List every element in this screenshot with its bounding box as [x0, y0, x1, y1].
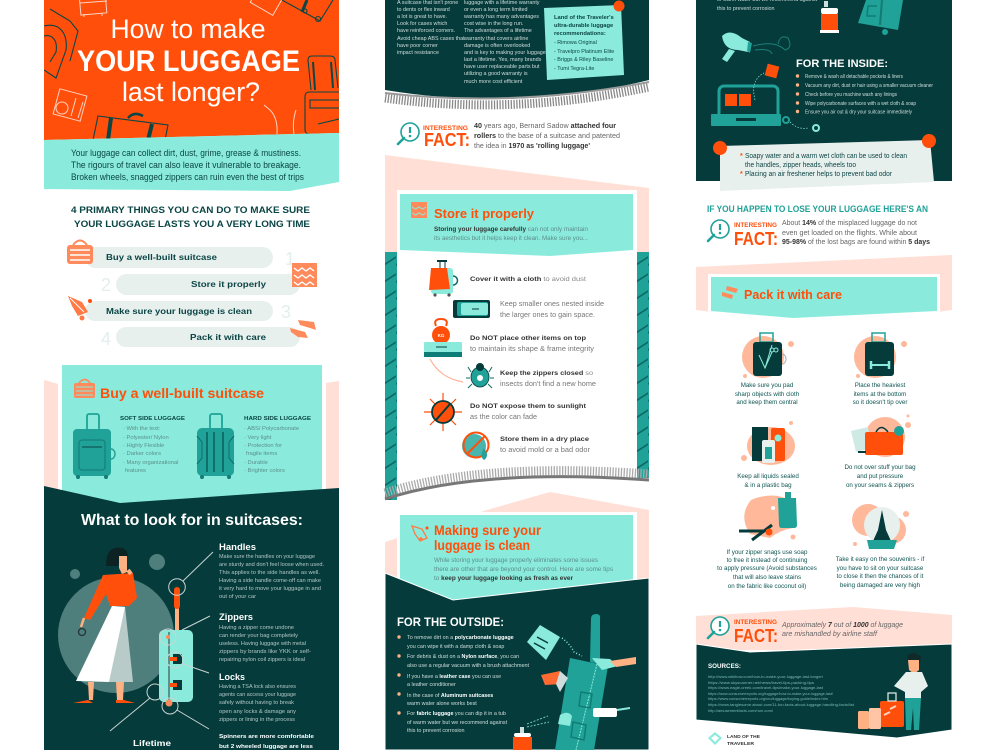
icon: cleaning brush: [68, 296, 92, 320]
callout: interesting fact 2: even get loaded on the flights. While about: [782, 230, 917, 237]
text: zipper: on the fabric like coconut oil): [728, 583, 806, 590]
text: handles: out of your car: [219, 594, 256, 600]
heading: primary things: [71, 205, 310, 229]
callout: interesting fact 2: 95-98% of the lost bags are found within 5 days: [782, 239, 930, 246]
text: locks: zippers or lining in the process: [219, 717, 295, 723]
text: heaviest items: so it doesn't tip over: [853, 399, 907, 406]
text: corners column: have poor corner: [397, 43, 438, 49]
icon: hair dryer: [722, 32, 790, 62]
icon: bug: [466, 363, 494, 388]
callout: inside note: *: [740, 153, 743, 160]
text: warranty column: or even a long term limited: [464, 7, 528, 13]
callout: interesting fact 1: FACT:: [424, 130, 470, 150]
list: four things: 2: [101, 275, 111, 295]
text: do not place: Do NOT place other items on top: [470, 335, 586, 342]
icon: passport outline: [53, 89, 87, 121]
text: zippers: Zippers: [219, 612, 253, 622]
text: outside tips continued: [717, 0, 818, 12]
text: heaviest items: [853, 382, 907, 406]
callout: recommendations note: - Travelpro Platinum Elite: [554, 49, 614, 55]
list: links: http://amusementfacts.com/rum.com/: [708, 708, 774, 713]
icon: sharp objects suitcase: [742, 333, 794, 378]
illustration: suitcase bottom: [858, 0, 903, 35]
text: souvenirs: [836, 556, 924, 589]
text: corners column: have reinforced corners.: [397, 28, 455, 34]
text: warranty column: [463, 0, 546, 85]
arrow: bug to case: [430, 359, 463, 382]
text: liquids: & in a plastic bag: [744, 482, 792, 489]
text: dry place: Store them in a dry place: [500, 436, 589, 443]
text: handles: Handles: [219, 542, 256, 552]
list: links: https://www.consumerreports.org/luggage/how-to-make-your-luggage-last/: [708, 691, 834, 696]
text: warranty column: have user replaceable parts but: [464, 64, 540, 70]
illustration: traveller with luggage: [858, 653, 928, 730]
icon: no sunlight: [424, 393, 462, 431]
text: zippers closed: Keep the zippers closed so: [500, 370, 593, 377]
list: outside tips: warm water alone works best: [406, 701, 477, 707]
text: sunlight: [470, 403, 587, 421]
list: links: [708, 674, 855, 713]
text: intro: While storing your luggage properly eliminates some issues: [434, 557, 598, 564]
list: outside tips: To remove dirt on a polycarbonate luggage: [407, 635, 514, 641]
text: do not place: to maintain its shape & frame integrity: [470, 346, 595, 353]
callout: inside note: [713, 134, 936, 191]
icon: heaviest items suitcase: [854, 333, 907, 378]
icon: brush: [412, 526, 428, 541]
text: liquids: [737, 473, 799, 489]
text: handles: Having a side handle come-off can make: [219, 578, 321, 584]
icon: zipper and soap: [739, 492, 797, 540]
text: hard side luggage: · Brighter colors: [244, 468, 285, 474]
text: dry place: to avoid mold or a bad odor: [500, 447, 591, 454]
list: four things: Buy a well-built suitcase: [106, 252, 217, 262]
icon: stacked cases: [292, 263, 317, 287]
icon: souvenir snow globe: [852, 504, 909, 549]
text: intro: [434, 226, 588, 242]
callout: interesting fact 1: the idea in 1970 as 'rolling luggage': [474, 143, 590, 150]
list: outside tips: [397, 635, 529, 734]
text: zippers: Having a zipper come undone: [219, 625, 294, 631]
icon: kettlebell on case: [424, 319, 462, 357]
callout: interesting fact 2: About 14% of the misplaced luggage do not: [782, 220, 917, 227]
icon: basket: [74, 380, 95, 398]
list: four things: 4: [101, 329, 111, 349]
icon: top suitcase outline: [79, 0, 107, 17]
list: outside tips: also use a regular vacuum with a brush attachment: [407, 663, 529, 669]
callout: inside note: Placing an air freshener helps to prevent bad odor: [745, 171, 893, 178]
icon: covered suitcase: [429, 260, 458, 297]
text: soft side luggage: [120, 416, 185, 474]
text: hard side luggage: · ABS/ Polycarbonate: [244, 426, 299, 432]
heading: FOR THE OUTSIDE:: [397, 617, 504, 629]
text: souvenirs: being damaged are very high: [840, 582, 921, 589]
callout: interesting fact 3: Approximately 7 out of 1000 of luggage: [781, 622, 903, 629]
list: inside tips: [796, 74, 933, 116]
text: intro: its aesthetics but it helps keep it clean. Make sure you...: [434, 235, 588, 242]
text: cover: Cover it with a cloth to avoid dust: [470, 276, 586, 283]
callout: recommendations note: recommendations:: [554, 31, 606, 37]
text: sharp objects: [735, 382, 800, 406]
text: soft side luggage: SOFT SIDE LUGGAGE: [120, 416, 185, 422]
callout: interesting fact 1: rollers to the base of a suitcase and patented: [474, 133, 620, 140]
icon: backpack outline: [44, 9, 78, 78]
text: intro: there are other that are beyond your control. Here are some tips: [434, 566, 613, 573]
list: outside tips: If you have a leather case you can use: [407, 674, 501, 680]
text: soft side luggage: · Darker colors: [123, 451, 161, 457]
callout: interesting fact 2: FACT:: [734, 229, 778, 249]
text: handles: it very hard to move your luggage in and: [219, 586, 321, 592]
text: warranty column: utilizing a good warranty is: [464, 71, 528, 77]
text: zipper: [717, 549, 817, 590]
callout: recommendations note: - Tumi Tegra-Lite: [554, 66, 594, 72]
icon: caring hands: [290, 320, 316, 338]
text: handles: This applies to the side handles as well.: [219, 570, 320, 576]
text: locks: [219, 672, 296, 723]
text: handles: Make sure the handles on your luggage: [219, 554, 315, 560]
callout: interesting fact 1: INTERESTING: [423, 125, 468, 132]
text: wheels: Spinners are more comfortable: [219, 734, 315, 740]
icon: no moisture: [462, 432, 488, 460]
text: sharp objects: sharp objects with cloth: [735, 391, 800, 398]
list: four things: Make sure your luggage is clean: [106, 306, 252, 316]
panel: making sure your luggage is clean: [385, 492, 649, 600]
icon: basket: [67, 240, 93, 264]
text: zippers: zippers by brands like YKK or self-: [219, 649, 311, 655]
panel: intro band: [44, 133, 339, 191]
callout: interesting fact 3: are mishandled by airline staff: [782, 631, 878, 638]
heading: Making sure your: [434, 522, 542, 538]
heading: Buy a well-built suitcase: [100, 385, 264, 401]
panel: for the outside: [385, 573, 649, 750]
text: warranty column: warranty that covers airline: [463, 36, 528, 42]
text: intro: [434, 557, 613, 582]
text: heaviest items: Place the heaviest: [855, 382, 906, 389]
text: warranty column: much more cost efficient: [464, 79, 523, 85]
text: hard side luggage: HARD SIDE LUGGAGE: [244, 416, 311, 422]
text: souvenirs: Take it easy on the souvenirs - if: [836, 556, 924, 563]
callout: interesting fact 1: [398, 123, 620, 150]
text: zipper: to free it instead of continuing: [727, 557, 808, 564]
text: corners column: impact resistance: [397, 50, 439, 56]
illustration: cleaning suitcase: [513, 614, 636, 750]
heading: Store it properly: [434, 207, 534, 221]
text: soft side luggage: · With the text:: [123, 426, 161, 432]
text: dry place: [500, 436, 591, 454]
icon: hard luggage: [197, 414, 234, 479]
callout: interesting fact 2: [708, 220, 930, 249]
text: corners column: [397, 0, 465, 56]
text: corners column: Look for cases which: [397, 21, 447, 27]
title text: last longer?: [122, 77, 260, 107]
illustration: open suitcase: [711, 64, 819, 131]
text: overstuffed: and put pressure: [857, 473, 904, 480]
list: links: https://www.eagle-creek.com/travel-tips/make-your-luggage-last: [708, 685, 824, 690]
callout: recommendations note: Land of the Traveler's: [554, 15, 614, 21]
list: inside tips: Vacuum any dirt, dust or hair using a smaller vacuum cleaner: [805, 83, 933, 89]
list: outside tips: For debris & dust on a Nylon surface, you can: [407, 654, 519, 660]
list: four things: 3: [281, 302, 291, 322]
text: soft side luggage: · Many organizational: [123, 460, 178, 466]
text: nested: the larger ones to gain space.: [500, 312, 595, 319]
heading: SOURCES:: [708, 663, 741, 670]
icon: top right luggage: [282, 0, 333, 22]
text: nested: [500, 301, 604, 319]
list: inside tips: Ensure you air out & dry your suitcase immediately: [805, 110, 912, 116]
heading: FOR THE INSIDE:: [796, 58, 888, 70]
callout: interesting fact 2: INTERESTING: [734, 222, 777, 229]
panel: intro band: Broken wheels, snagged zippers can ruin even the best of trips: [71, 172, 304, 182]
callout: inside note: *: [740, 171, 743, 178]
icon: soft luggage: [73, 414, 115, 479]
text: wheels: but 2 wheeled luggage are less: [219, 744, 314, 750]
text: hard side luggage: [244, 416, 311, 474]
panel: pack it with care: [696, 255, 952, 590]
decorative zipper: [385, 471, 649, 493]
heading: What to look for in suitcases:: [81, 512, 303, 529]
text: warranty column: damage is often overlooked: [464, 43, 530, 49]
text: nested: Keep smaller ones nested inside: [500, 301, 604, 308]
heading: Pack it with care: [744, 288, 842, 302]
text: soft side luggage: · Highly Flexible: [123, 443, 164, 449]
text: corners column: a lot is great to have.: [397, 14, 447, 20]
text: locks: Locks: [219, 672, 245, 682]
logo: land of the traveler: TRAVELER: [727, 741, 755, 747]
text: zippers: useless. Having luggage with metal: [219, 641, 306, 647]
text: sunlight: Do NOT expose them to sunlight: [470, 403, 587, 410]
panel: store it properly: [385, 155, 649, 500]
panel: what to look for: [44, 486, 339, 750]
list: links: http://www.wikihow.com/how-to-make-your-luggage-last-longer/: [708, 674, 824, 679]
text: warranty column: last a lifetime. Yes, many brands: [464, 57, 542, 63]
text: handles: are sturdy and don't feel loose when used.: [219, 562, 324, 568]
text: overstuffed: [844, 464, 916, 489]
text: overstuffed: on your seams & zippers: [846, 482, 914, 489]
list: outside tips: a leather conditioner: [407, 682, 456, 688]
icon: hands: [722, 286, 738, 299]
text: locks: agents can access your luggage: [219, 692, 296, 698]
text: locks: open any locks & damage any: [219, 709, 296, 715]
text: sunlight: as the color can fade: [470, 414, 537, 421]
callout: interesting fact 3: INTERESTING: [734, 619, 777, 626]
panel: buy a well-built suitcase: [44, 365, 339, 507]
callout: recommendations note: ultra-durable luggage: [554, 23, 614, 29]
icon: magnifier: [708, 617, 729, 638]
text: zippers closed: [500, 370, 596, 388]
text: overstuffed: Do not over stuff your bag: [844, 464, 916, 471]
text: hard side luggage: · Very light: [244, 435, 272, 441]
icon: overstuffed bag: [851, 414, 911, 457]
callout: interesting fact 3: [696, 607, 952, 650]
panel: sources: [696, 644, 952, 738]
illustration: woman with suitcase: [58, 548, 213, 731]
icon: kettlebell on case: KG: [438, 333, 445, 338]
text: zippers closed: insects don't find a new home: [500, 381, 596, 388]
list: outside tips: of warm water but we recommend against: [407, 720, 508, 726]
text: hard side luggage: · Protection for: [244, 443, 282, 449]
list: four things: 1: [285, 249, 295, 269]
heading: primary things: 4 PRIMARY THINGS YOU CAN DO TO MAKE SURE: [71, 205, 310, 215]
list: inside tips: Remove & wash all detachable pockets & liners: [805, 74, 903, 80]
text: warranty column: The advantages of a lifetime: [464, 28, 532, 34]
icon: ticket outline: [250, 0, 282, 15]
icon: liquids: [741, 421, 795, 465]
callout: interesting fact 3: FACT:: [734, 626, 778, 646]
callout: recommendations note: - Rimowa Original: [554, 40, 597, 46]
text: souvenirs: you have to sit on your suitcase: [837, 565, 924, 572]
text: warranty column: cost wise in the long run.: [464, 21, 523, 27]
logo: land of the traveler: [708, 732, 761, 747]
text: sharp objects: Make sure you pad: [741, 382, 794, 389]
text: warranty column: luggage with a lifetime warranty: [464, 0, 540, 6]
callout: recommendations note: - Briggs & Riley Baseline: [554, 57, 613, 63]
text: heaviest items: items at the bottom: [854, 391, 906, 398]
text: corners column: Avoid cheap ABS cases that: [397, 36, 465, 42]
text: sharp objects: and keep them central: [736, 399, 798, 406]
callout: inside note: Soapy water and a warm wet cloth can be used to clean: [745, 153, 907, 160]
text: intro: Storing your luggage carefully can not only maintain: [434, 226, 588, 233]
list: four things: [67, 240, 317, 349]
icon: right suitcase outline: [304, 56, 339, 134]
text: soft side luggage: · Polyester/ Nylon: [123, 435, 169, 441]
text: intro: to keep your luggage looking as fresh as ever: [434, 575, 574, 582]
illustration: spray can: [820, 1, 839, 33]
list: links: https://www.skyscanner.net/news/travel-tips-packing-tips: [708, 680, 814, 685]
list: four things: Pack it with care: [190, 332, 266, 342]
heading: lost luggage: IF YOU HAPPEN TO LOSE YOUR LUGGAGE HERE'S AN: [707, 204, 928, 214]
text: locks: Having a TSA lock also ensures: [219, 684, 296, 690]
list: inside tips: Check before you machine wash any linings: [805, 92, 897, 98]
callout: interesting fact 1: 40 years ago, Bernard Sadow attached four: [474, 123, 616, 130]
panel: intro band: Your luggage can collect dirt, dust, grime, grease & mustiness.: [71, 148, 301, 158]
text: soft side luggage: features: [125, 468, 146, 474]
list: links: https://www.consumerreports.org/cro/luggage/buying-guide/index.htm: [708, 696, 828, 701]
decorative zipper: [385, 87, 649, 105]
list: outside tips: In the case of Aluminum suitcases: [407, 693, 493, 699]
text: do not place: [470, 335, 595, 353]
heading: [434, 522, 542, 553]
text: hard side luggage: fragile items: [246, 451, 277, 457]
list: outside tips: For fabric luggage you can dip it in a tub: [407, 711, 506, 717]
callout: recommendations note: [544, 0, 624, 80]
text: outside tips continued: this to prevent corrosion: [717, 6, 775, 12]
text: zipper: If your zipper snags use soap: [727, 549, 808, 556]
icon: bottom suitcase outline: [93, 114, 168, 140]
text: lifetime: Lifetime: [133, 738, 171, 748]
list: inside tips: Wipe polycarbonate surfaces with a wet cloth & soap: [805, 101, 916, 107]
text: zippers: can render your bag completely: [219, 633, 298, 639]
panel: construction and warranty: [385, 0, 649, 105]
heading: primary things: YOUR LUGGAGE LASTS YOU A VERY LONG TIME: [74, 219, 310, 229]
icon: magnifier: [708, 220, 729, 241]
text: hard side luggage: · Durable: [244, 460, 268, 466]
list: outside tips: this to prevent corrosion: [407, 728, 465, 734]
panel: for the inside: [696, 0, 952, 181]
list: four things: Store it properly: [191, 279, 266, 289]
icon: earphones: [264, 105, 296, 134]
panel: title banner: [44, 0, 345, 142]
text: warranty column: and is key to making your luggage: [464, 50, 546, 56]
list: links: https://www.tanglesome.about.com/11-fun-facts-about-luggage-handling-facts/list: [708, 702, 855, 707]
title text: How to make: [110, 14, 266, 44]
text: zipper: that will also leave stains: [733, 574, 801, 581]
title text: [77, 14, 300, 107]
text: souvenirs: to close it then the chances of it: [837, 573, 924, 580]
text: warranty column: warranty has many advantages: [463, 14, 539, 20]
text: locks: safely without having to break: [219, 700, 294, 706]
text: zippers: repairing nylon coil zippers is ideal: [219, 657, 305, 663]
heading: luggage is clean: [434, 537, 530, 553]
text: corners column: to dents or flex inward: [397, 7, 450, 13]
list: outside tips: you can wipe it with a damp cloth & soap: [407, 644, 504, 650]
text: corners column: A suitcase that isn't prone: [397, 0, 458, 6]
callout: inside note: the handles, zipper heads, wheels too: [745, 162, 856, 169]
text: wheels: [219, 734, 315, 750]
text: zipper: to apply pressure (Avoid substances: [717, 565, 817, 572]
text: liquids: Keep all liquids sealed: [737, 473, 799, 480]
icon: magnifier: [398, 123, 419, 144]
logo: land of the traveler: LAND OF THE: [727, 734, 761, 740]
icon: nested cases: [453, 300, 490, 318]
text: handles: [219, 542, 324, 600]
text: zippers: [219, 612, 311, 663]
icon: stacked cases: [411, 202, 427, 218]
panel: intro band: The rigours of travel can also leave it vulnerable to breakage.: [71, 160, 301, 170]
title text: YOUR LUGGAGE: [77, 45, 300, 78]
